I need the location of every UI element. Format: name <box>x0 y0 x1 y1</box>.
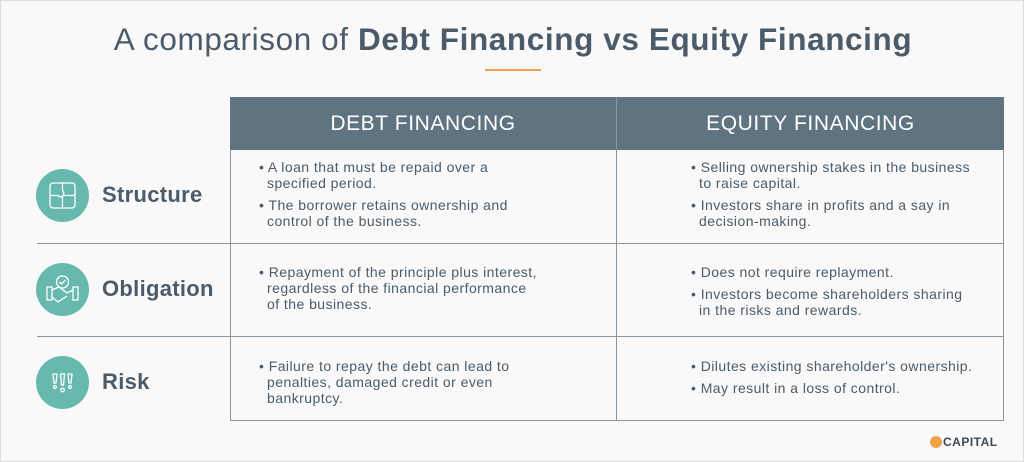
cell: equity obligation <box>691 264 962 318</box>
cell: equity obligation: in the risks and rewards. <box>699 302 862 318</box>
cell: debt risk <box>259 358 510 406</box>
label: obligation: Obligation <box>102 276 214 301</box>
title: A comparison of Debt Financing vs Equity Financing <box>114 21 912 57</box>
icon: exclamations <box>36 356 89 409</box>
logo: CAPITAL <box>943 435 998 449</box>
cell: debt risk: penalties, damaged credit or even <box>267 374 493 390</box>
cell: debt obligation: of the business. <box>267 296 372 312</box>
header: equity: EQUITY FINANCING <box>706 112 915 135</box>
cell: equity structure: • Investors share in profits and a say in <box>691 197 950 213</box>
cell: debt structure: • A loan that must be repaid over a <box>259 159 488 175</box>
cell: debt risk: bankruptcy. <box>267 390 343 406</box>
cell: equity structure <box>691 159 970 229</box>
cell: equity risk <box>691 358 972 396</box>
cell: debt obligation <box>259 264 537 312</box>
header: debt <box>230 97 616 150</box>
cell: equity risk: • May result in a loss of control. <box>691 380 900 396</box>
cell: debt obligation: • Repayment of the principle plus interest, <box>259 264 537 280</box>
cell: debt structure: control of the business. <box>267 213 422 229</box>
header: debt: DEBT FINANCING <box>330 112 516 135</box>
cell: debt structure: • The borrower retains ownership and <box>259 197 508 213</box>
icon: puzzle <box>36 169 89 222</box>
cell: debt obligation: regardless of the financial performance <box>267 280 527 296</box>
cell: equity obligation: • Investors become shareholders sharing <box>691 286 962 302</box>
cell: equity obligation: • Does not require replayment. <box>691 264 894 280</box>
cell: equity structure: decision-making. <box>699 213 811 229</box>
cell: equity structure: • Selling ownership stakes in the business <box>691 159 970 175</box>
cell: debt structure: specified period. <box>267 175 377 191</box>
table <box>230 97 1004 421</box>
header: equity <box>617 97 1004 150</box>
icon: handshake <box>36 263 89 316</box>
cell: debt structure <box>259 159 508 229</box>
cell: equity structure: to raise capital. <box>699 175 801 191</box>
title underline <box>485 69 541 71</box>
label: risk: Risk <box>102 369 150 394</box>
cell: debt risk: • Failure to repay the debt can lead to <box>259 358 510 374</box>
label: structure: Structure <box>102 182 202 207</box>
cell: equity risk: • Dilutes existing shareholder's ownership. <box>691 358 972 374</box>
